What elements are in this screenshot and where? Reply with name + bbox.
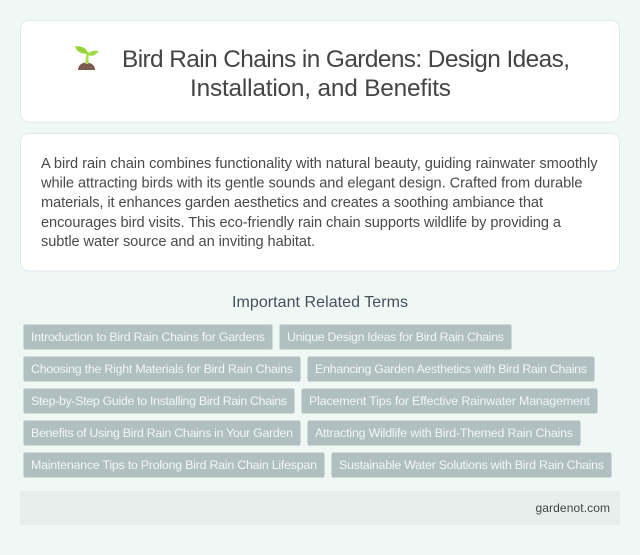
heading: related terms: Important Related Terms <box>232 294 408 311</box>
tag <box>24 388 294 414</box>
tag <box>24 420 300 446</box>
footer source text: gardenot.com <box>536 501 610 515</box>
title: Bird Rain Chains in Gardens: Design Ideas, <box>122 46 570 73</box>
tag: Choosing the Right Materials for Bird Rain Chains <box>31 362 293 376</box>
tag: Step-by-Step Guide to Installing Bird Rain Chains <box>31 394 287 408</box>
tag: Benefits of Using Bird Rain Chains in Your Garden <box>31 426 293 440</box>
text block: description paragraph: subtle water source and an inviting habitat. <box>41 234 315 250</box>
panel: related term tags <box>24 324 612 478</box>
tag: Placement Tips for Effective Rainwater Management <box>309 394 591 408</box>
text block: description paragraph: while attracting birds with its gentle sounds and elegant design. Crafted from durable <box>40 176 582 192</box>
tag <box>280 324 512 350</box>
tag: Introduction to Bird Rain Chains for Gardens <box>31 330 265 344</box>
text block: description paragraph <box>40 156 598 250</box>
icon: seedling <box>75 46 98 70</box>
text block: description paragraph: encourages bird visits. This eco-friendly rain chain supports wildlife by providing a <box>41 215 562 231</box>
tag: Sustainable Water Solutions with Bird Rain Chains <box>339 458 604 472</box>
tag <box>308 420 580 446</box>
panel: description <box>20 134 620 271</box>
tag <box>24 452 324 478</box>
tag <box>308 356 594 382</box>
tag: Attracting Wildlife with Bird-Themed Rain Chains <box>315 426 573 440</box>
tag: Enhancing Garden Aesthetics with Bird Rain Chains <box>315 362 587 376</box>
panel: title card <box>20 20 620 122</box>
tag <box>24 324 272 350</box>
tag: Maintenance Tips to Prolong Bird Rain Chain Lifespan <box>31 458 317 472</box>
tag <box>302 388 598 414</box>
title <box>122 46 570 102</box>
tag <box>332 452 612 478</box>
text block: description paragraph: A bird rain chain combines functionality with natural beauty, guiding rainwater smoothly <box>41 156 598 172</box>
text block: description paragraph: materials, it enhances garden aesthetics and creates a soothing ambiance that <box>41 195 543 211</box>
title: Installation, and Benefits <box>190 75 451 102</box>
tag: Unique Design Ideas for Bird Rain Chains <box>287 330 504 344</box>
tag <box>24 356 300 382</box>
footer <box>20 491 620 525</box>
